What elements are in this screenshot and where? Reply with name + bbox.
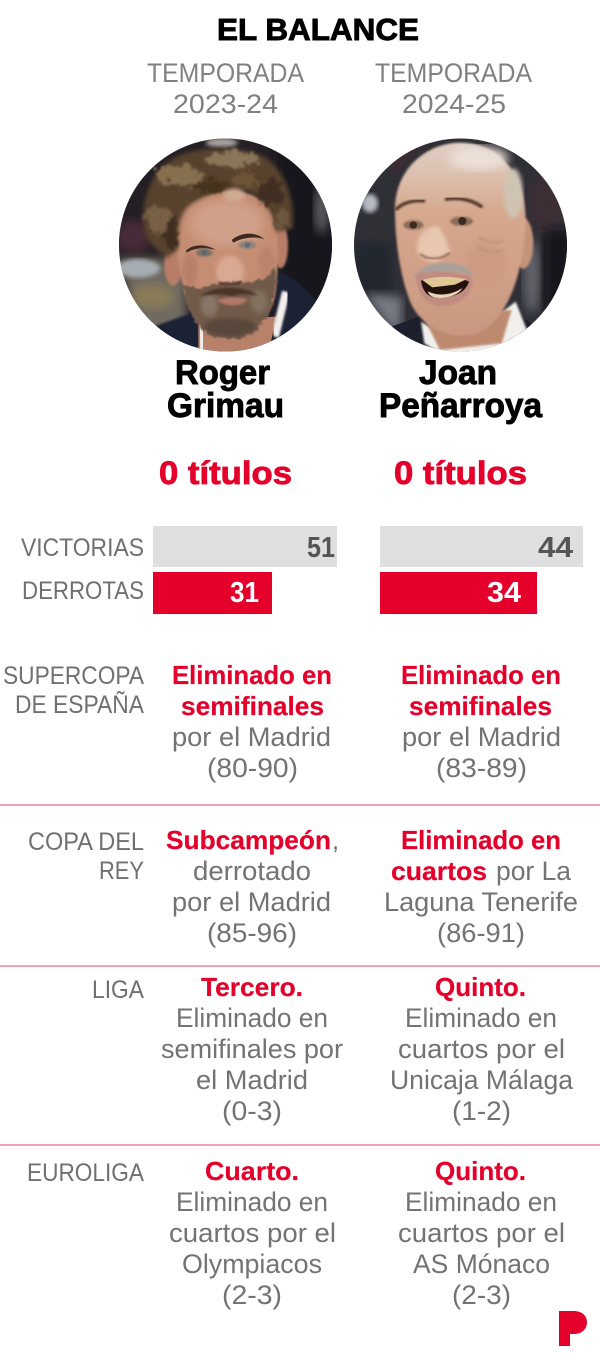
copa Peñarroya: cuartos	[391, 856, 487, 886]
bar: derrotas Grimau: 31	[230, 577, 259, 609]
liga Peñarroya: Quinto.	[435, 972, 526, 1002]
euroliga Grimau: cuartos por el	[169, 1218, 336, 1248]
label: derrotas: DERROTAS	[22, 577, 144, 605]
euroliga Peñarroya	[398, 1156, 565, 1310]
bar: victorias Grimau	[153, 526, 337, 567]
euroliga Peñarroya: cuartos por el	[398, 1218, 565, 1248]
copa Grimau: (85-96)	[207, 918, 297, 948]
euroliga Peñarroya: Quinto.	[435, 1156, 526, 1186]
liga Peñarroya: (1-2)	[452, 1096, 511, 1126]
euroliga Grimau: (2-3)	[222, 1280, 282, 1310]
liga Grimau: Eliminado en	[176, 1003, 328, 1033]
season 2023-24: TEMPORADA	[147, 58, 304, 88]
bar: victorias Peñarroya	[380, 526, 583, 567]
label: euroliga: EUROLIGA	[27, 1159, 144, 1187]
copa Peñarroya: Laguna Tenerife	[384, 887, 578, 917]
supercopa Peñarroya: (83-89)	[436, 753, 527, 783]
liga Peñarroya	[390, 972, 573, 1126]
season 2024-25: TEMPORADA	[375, 58, 532, 88]
portrait: Roger Grimau	[119, 138, 332, 352]
liga Peñarroya: Eliminado en	[405, 1003, 557, 1033]
label: copa del rey	[28, 828, 144, 885]
name: Roger Grimau	[167, 354, 284, 425]
supercopa Grimau: Eliminado en	[172, 660, 332, 690]
supercopa Peñarroya: semifinales	[409, 691, 552, 721]
name: Joan Peñarroya: Joan	[419, 354, 497, 392]
supercopa Grimau: semifinales	[181, 691, 324, 721]
name: Joan Peñarroya: Peñarroya	[379, 387, 543, 425]
copa Peñarroya: (86-91)	[437, 918, 525, 948]
supercopa Peñarroya: Eliminado en	[401, 660, 561, 690]
liga Grimau: semifinales por	[161, 1034, 343, 1064]
copa Grimau	[166, 825, 339, 948]
copa Peñarroya: Eliminado en	[401, 825, 561, 855]
liga Peñarroya: cuartos por el	[398, 1034, 565, 1064]
copa Grimau: derrotado	[193, 856, 311, 886]
copa Peñarroya: por La	[496, 856, 571, 886]
liga Peñarroya: Unicaja Málaga	[390, 1065, 573, 1095]
copa Peñarroya	[384, 825, 578, 948]
supercopa Grimau: por el Madrid	[172, 722, 331, 752]
bar: victorias Peñarroya: 44	[538, 532, 573, 564]
bar: derrotas Peñarroya	[380, 572, 537, 614]
liga Grimau	[161, 972, 343, 1126]
bar: derrotas Grimau	[153, 572, 272, 614]
supercopa Peñarroya	[401, 660, 561, 783]
label: supercopa	[3, 662, 144, 719]
copa Grimau: Subcampeón	[166, 825, 331, 855]
euroliga Grimau: Olympiacos	[182, 1249, 322, 1279]
euroliga Grimau: Eliminado en	[176, 1187, 328, 1217]
name: Roger Grimau: Grimau	[167, 387, 284, 425]
supercopa Grimau: (80-90)	[207, 753, 298, 783]
bar: victorias Grimau: 51	[307, 532, 335, 564]
liga Grimau: (0-3)	[222, 1096, 282, 1126]
season 2023-24	[147, 58, 304, 119]
icon: publisher logo	[559, 1311, 587, 1346]
copa Grimau: por el Madrid	[172, 887, 331, 917]
label: victorias: VICTORIAS	[21, 534, 144, 562]
supercopa Peñarroya: por el Madrid	[402, 722, 561, 752]
name: Joan Peñarroya	[379, 354, 543, 425]
euroliga Grimau: Cuarto.	[205, 1156, 299, 1186]
label: supercopa: SUPERCOPA	[3, 662, 144, 690]
titles: Peñarroya: 0 títulos	[394, 455, 527, 491]
label: copa del rey: REY	[99, 857, 144, 885]
portrait: Joan Peñarroya	[354, 138, 567, 352]
euroliga Peñarroya: AS Mónaco	[413, 1249, 550, 1279]
season 2024-25	[375, 58, 532, 119]
label: liga: LIGA	[92, 976, 144, 1004]
titles: Grimau: 0 títulos	[159, 455, 292, 491]
liga Grimau: Tercero.	[201, 972, 303, 1002]
euroliga Grimau	[169, 1156, 336, 1310]
label: supercopa: DE ESPAÑA	[15, 690, 144, 719]
liga Grimau: el Madrid	[196, 1065, 308, 1095]
season 2024-25: 2024-25	[402, 89, 506, 119]
euroliga Peñarroya: Eliminado en	[405, 1187, 557, 1217]
name: Roger Grimau: Roger	[175, 354, 270, 392]
supercopa Grimau	[172, 660, 332, 783]
euroliga Peñarroya: (2-3)	[452, 1280, 511, 1310]
title: EL BALANCE	[217, 12, 419, 47]
label: copa del rey: COPA DEL	[28, 828, 144, 856]
bar: derrotas Peñarroya: 34	[487, 577, 521, 609]
copa Grimau: ,	[332, 827, 339, 855]
season 2023-24: 2023-24	[173, 89, 278, 119]
